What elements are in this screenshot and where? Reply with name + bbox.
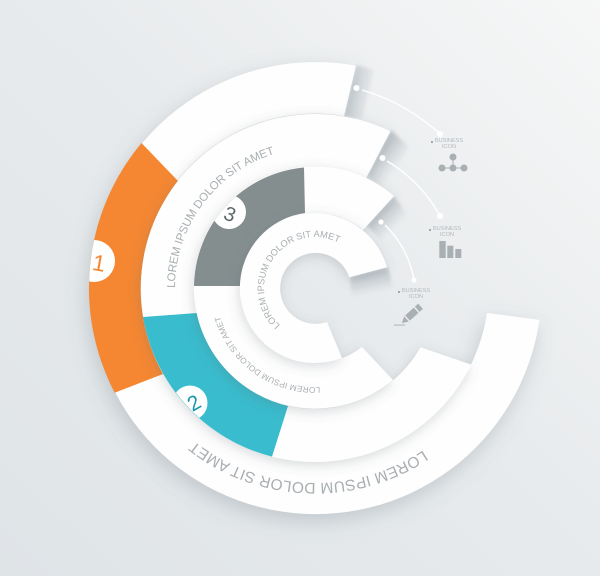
number badge 3 [214, 196, 246, 229]
panel: outer ring with orange segment 1 [80, 62, 541, 528]
label: business icon 3: BUSINESS [402, 288, 430, 294]
connector: inner ring to pencil icon [378, 219, 417, 283]
teal segment [143, 313, 288, 457]
label: business icon 1: BUSINESS [435, 138, 463, 144]
label: business icon 1: ICON [442, 144, 456, 150]
outer ring caption: LOREM IPSUM DOLOR SIT AMET [188, 444, 428, 494]
label: business icon 3 [398, 288, 430, 300]
panel: second ring with teal segment 2 [136, 112, 472, 470]
number badge 1: 1 [90, 249, 108, 277]
connector: second ring to bar icon [380, 155, 443, 219]
label: business icon 2: BUSINESS [433, 226, 461, 232]
number badge 2 [176, 386, 208, 418]
label: business icon 2 [429, 226, 461, 238]
panel: third ring with grey segment 3 [188, 165, 404, 416]
orange segment [89, 143, 178, 393]
grey segment [194, 168, 305, 286]
panel: inner ring [234, 212, 392, 370]
icon: pencil [394, 304, 423, 326]
icon: bar chart [439, 241, 461, 258]
third ring caption: LOREM IPSUM DOLOR SIT AMET [214, 318, 320, 393]
number badge 3: 3 [221, 203, 239, 227]
number badge 1 [89, 240, 115, 282]
connector: outer ring to network icon [354, 85, 443, 137]
inner ring caption: LOREM IPSUM DOLOR SIT AMET [258, 230, 341, 330]
label: business icon 2: ICON [440, 232, 454, 238]
icon: network [439, 154, 467, 171]
label: business icon 1 [431, 138, 463, 150]
label: business icon 3: ICON [409, 294, 423, 300]
second ring caption: LOREM IPSUM DOLOR SIT AMET [167, 146, 272, 287]
number badge 2: 2 [183, 391, 205, 416]
